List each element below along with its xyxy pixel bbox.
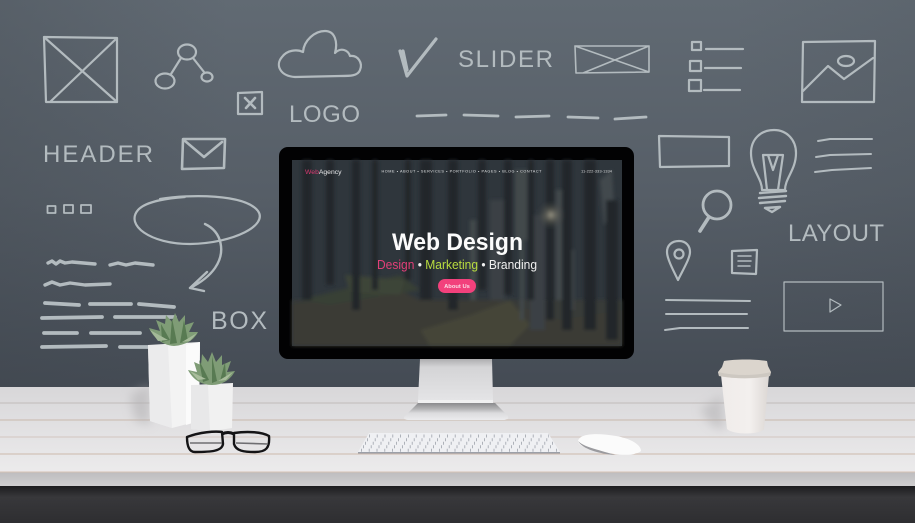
long lines: [665, 300, 750, 330]
forest photograph: [292, 160, 622, 346]
text lines: [42, 303, 175, 347]
icon: text lines: [815, 139, 872, 172]
coffee cup: [718, 360, 771, 434]
icon: ellipse with arrow: [135, 196, 260, 291]
hero title: Web Design: [392, 229, 523, 256]
monitor: [279, 147, 634, 420]
glasses: [187, 432, 269, 452]
button: About Us: About Us: [444, 284, 470, 290]
mouse: [578, 434, 641, 455]
short pot with succulent: [188, 352, 235, 431]
icon: envelope: [182, 139, 225, 169]
icon: check mark: [400, 39, 436, 76]
nav links: HOME • ABOUT • SERVICES • PORTFOLIO • PAGES • BLOG • CONTACT: [382, 170, 542, 174]
icon: picture placeholder: [802, 41, 875, 102]
plant pots: [148, 313, 235, 431]
wall background: [0, 0, 915, 388]
screen: [292, 160, 622, 346]
phone number: 11-222-333-1334: [581, 168, 613, 174]
dark floor band: [0, 486, 915, 523]
desk shadows: [130, 385, 724, 430]
icon: cloud: [279, 31, 361, 77]
icon: magnifier: [700, 191, 731, 231]
logo text: WebAgency: [305, 169, 342, 176]
keyboard: [358, 433, 560, 454]
label: LAYOUT: LAYOUT: [788, 220, 884, 247]
icon: document: [732, 250, 757, 274]
label: HEADER: HEADER: [43, 141, 153, 168]
icon: video player: [784, 282, 883, 331]
icon: share network: [156, 44, 212, 88]
icon: small cross box: [238, 92, 262, 114]
scribbled text lines: [45, 261, 153, 285]
label: LOGO: LOGO: [289, 101, 360, 128]
icon: three small squares: [48, 205, 91, 213]
tall pot with succulent: [148, 313, 200, 428]
button: About Us: [438, 279, 476, 293]
website navigation: [305, 168, 613, 176]
label: SLIDER: SLIDER: [458, 46, 553, 73]
desk front edge: [0, 472, 915, 486]
desk: [0, 387, 915, 523]
icon: checklist: [689, 42, 743, 91]
hero subtitle: Design • Marketing • Branding: [377, 258, 537, 272]
monitor bezel: [279, 147, 634, 359]
label: BOX: BOX: [211, 307, 267, 335]
monitor stand: [404, 359, 508, 420]
icon: slider placeholder: [575, 46, 649, 73]
icon: light bulb: [751, 130, 796, 212]
chalk sketches: right group: [659, 41, 884, 331]
icon: image placeholder: [44, 37, 117, 102]
icon: map pin: [667, 241, 690, 280]
plank lines: [0, 403, 915, 472]
icon: empty rectangle: [659, 136, 729, 167]
dashes: [417, 115, 646, 119]
chalk sketches: left group: [42, 37, 267, 347]
chalk sketches: top centre group: [279, 31, 649, 128]
